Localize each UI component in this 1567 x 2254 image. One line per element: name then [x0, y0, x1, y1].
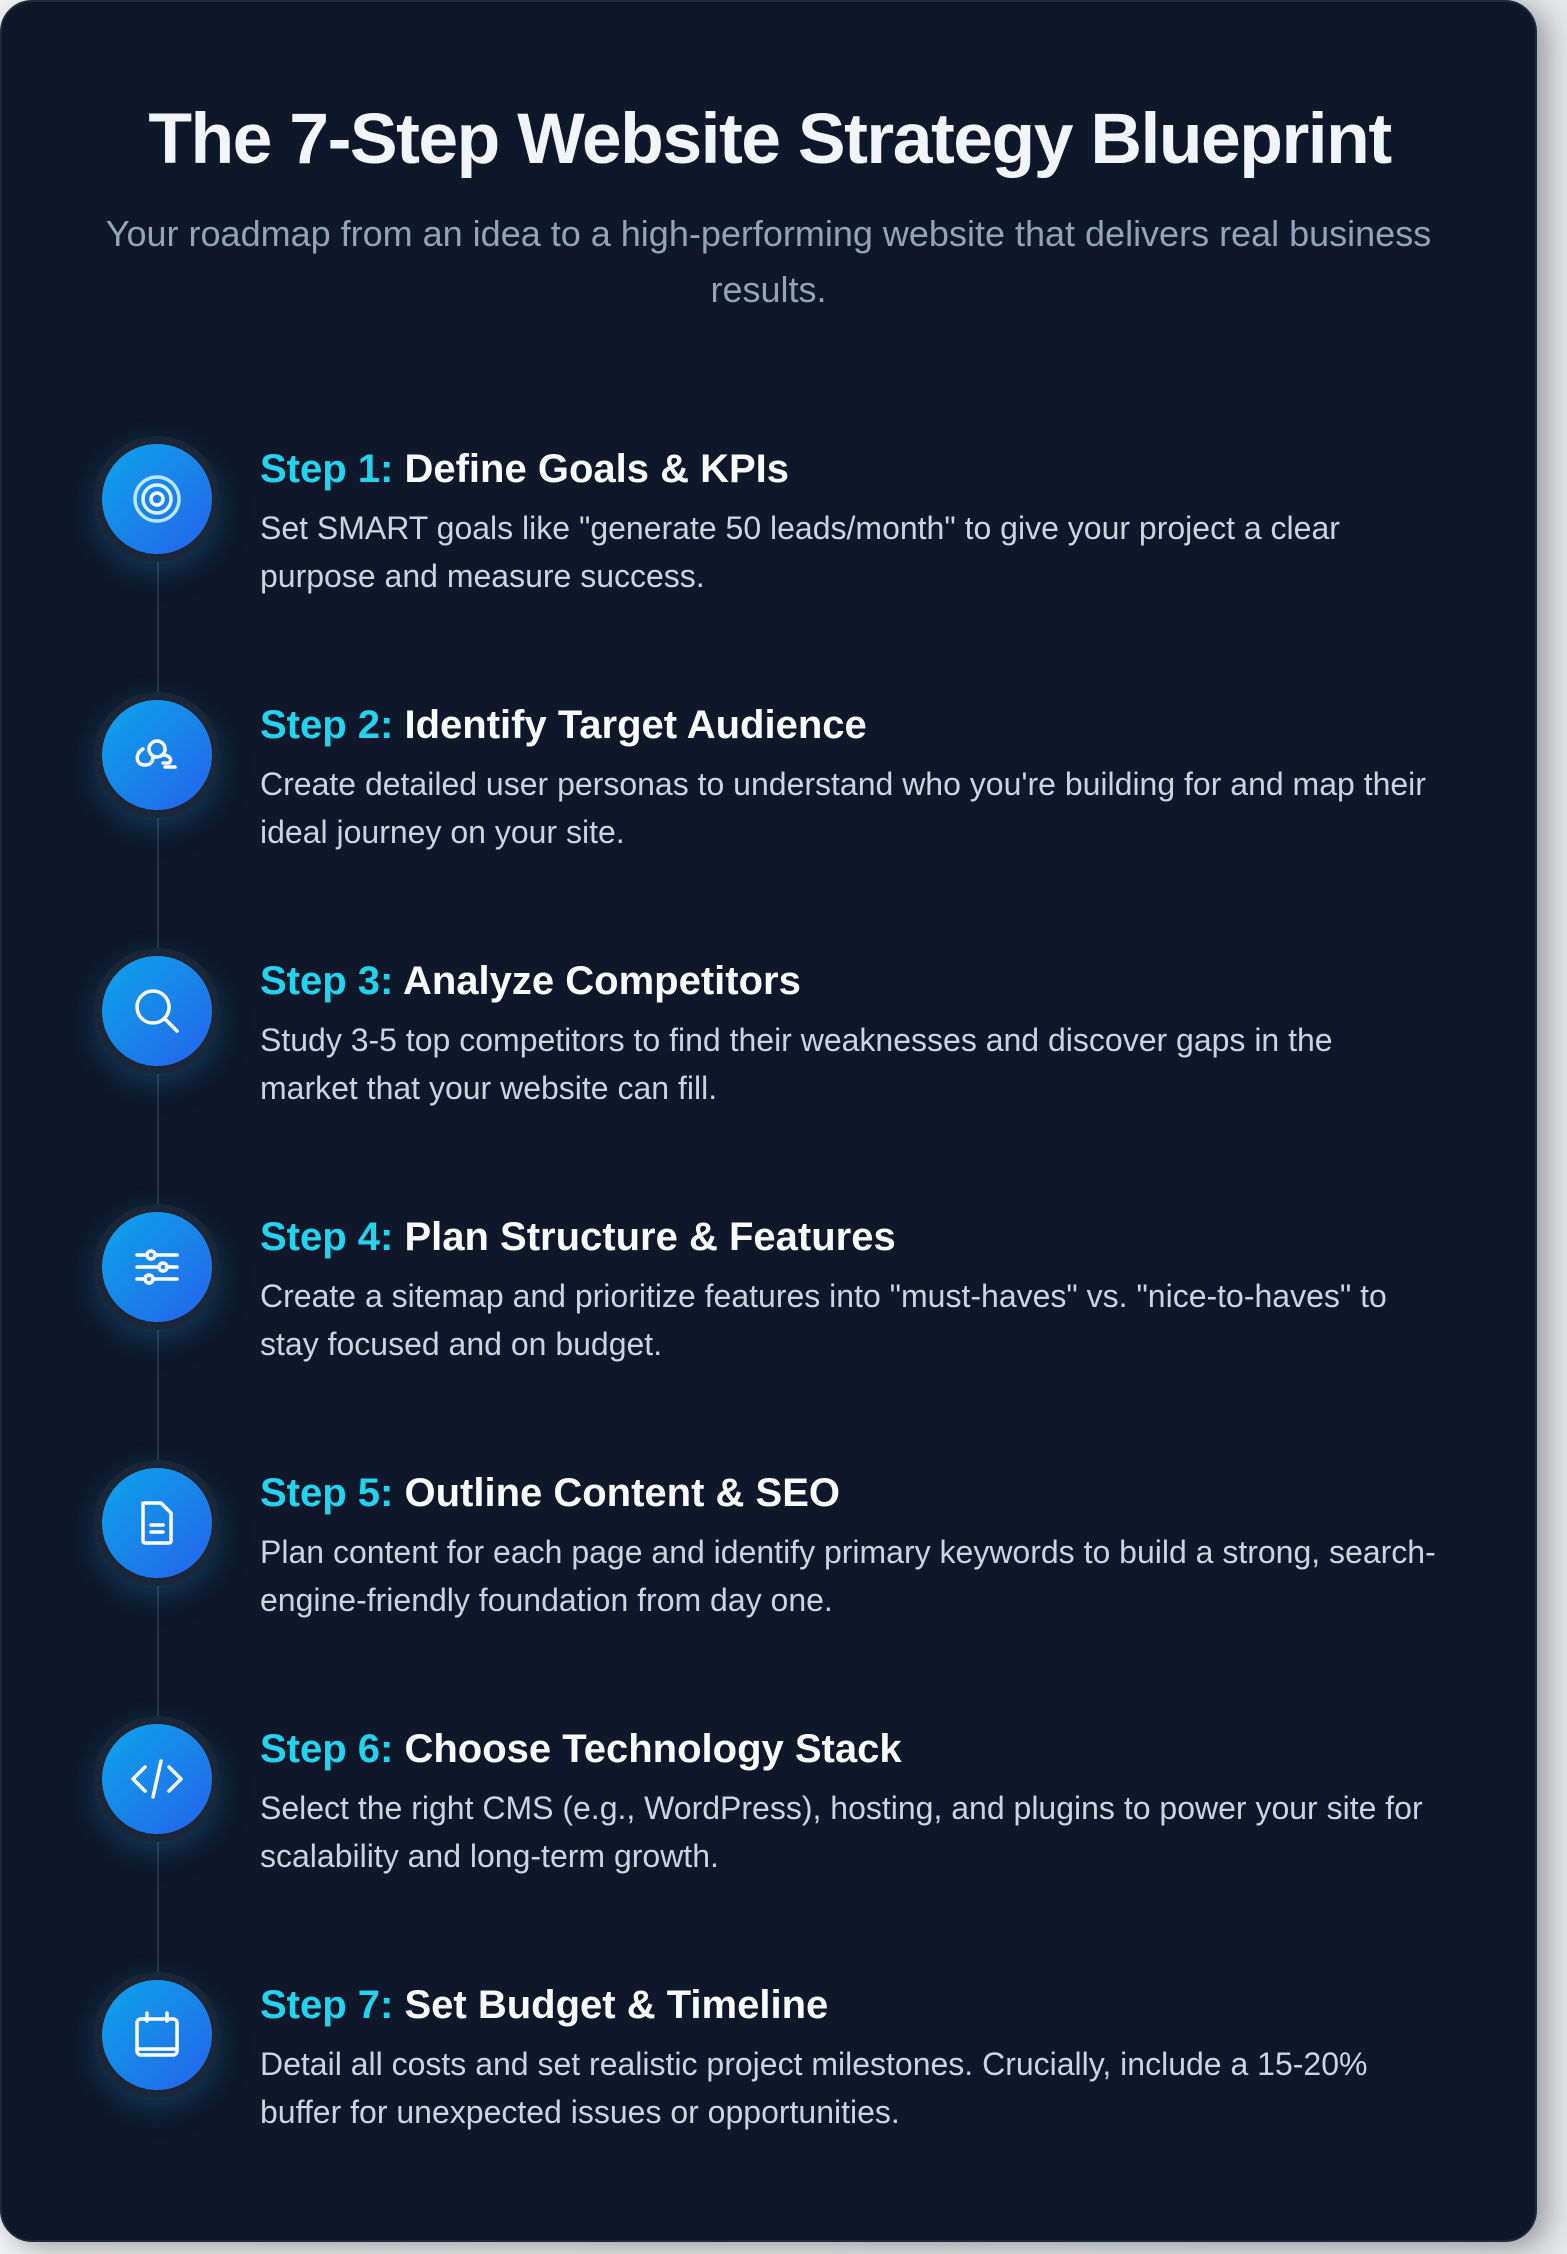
step 1	[82, 434, 1340, 594]
icon: users	[94, 692, 220, 818]
description	[260, 1278, 1387, 1362]
description: scalability and long-term growth.	[260, 1838, 719, 1874]
description: stay focused and on budget.	[260, 1326, 662, 1362]
step 3	[82, 946, 1333, 1106]
heading: Step 4: Plan Structure & Features	[260, 1215, 896, 1259]
heading: Step 2: Identify Target Audience	[260, 703, 867, 747]
description	[260, 2046, 1367, 2130]
description: Select the right CMS (e.g., WordPress), hosting, and plugins to power your site for	[260, 1790, 1423, 1826]
timeline connector	[157, 562, 159, 2042]
icon: code	[94, 1716, 220, 1842]
description: Detail all costs and set realistic project milestones. Crucially, include a 15-20%	[260, 2046, 1367, 2082]
description: market that your website can fill.	[260, 1070, 717, 1106]
icon: document	[94, 1460, 220, 1586]
heading: Step 5: Outline Content & SEO	[260, 1471, 840, 1515]
description: engine-friendly foundation from day one.	[260, 1582, 833, 1618]
heading: Step 6: Choose Technology Stack	[260, 1727, 902, 1771]
icon: search	[94, 948, 220, 1074]
heading: Step 3: Analyze Competitors	[260, 959, 801, 1003]
icon: calendar	[94, 1972, 220, 2098]
heading: Step 1: Define Goals & KPIs	[260, 447, 789, 491]
step 4	[82, 1202, 1387, 1362]
description: Set SMART goals like "generate 50 leads/month" to give your project a clear purpose and measure success.	[260, 510, 1340, 594]
description	[260, 1022, 1333, 1106]
heading: Step 7: Set Budget & Timeline	[260, 1983, 828, 2027]
step 5	[82, 1458, 1436, 1618]
description: Create a sitemap and prioritize features into "must-haves" vs. "nice-to-haves" to	[260, 1278, 1387, 1314]
description: Study 3-5 top competitors to find their weaknesses and discover gaps in the	[260, 1022, 1333, 1058]
step 6	[82, 1714, 1423, 1874]
description	[260, 1790, 1423, 1874]
description	[260, 1534, 1436, 1618]
description: Create detailed user personas to understand who you're building for and map their ideal journey on your site.	[260, 766, 1426, 850]
icon: sliders	[94, 1204, 220, 1330]
description: buffer for unexpected issues or opportunities.	[260, 2094, 900, 2130]
title: The 7-Step Website Strategy Blueprint	[148, 99, 1391, 179]
description: Plan content for each page and identify primary keywords to build a strong, search-	[260, 1534, 1436, 1570]
subtitle: Your roadmap from an idea to a high-performing website that delivers real business results.	[106, 213, 1431, 310]
step 2	[82, 690, 1426, 850]
step 7	[82, 1970, 1367, 2130]
icon: target	[94, 436, 220, 562]
